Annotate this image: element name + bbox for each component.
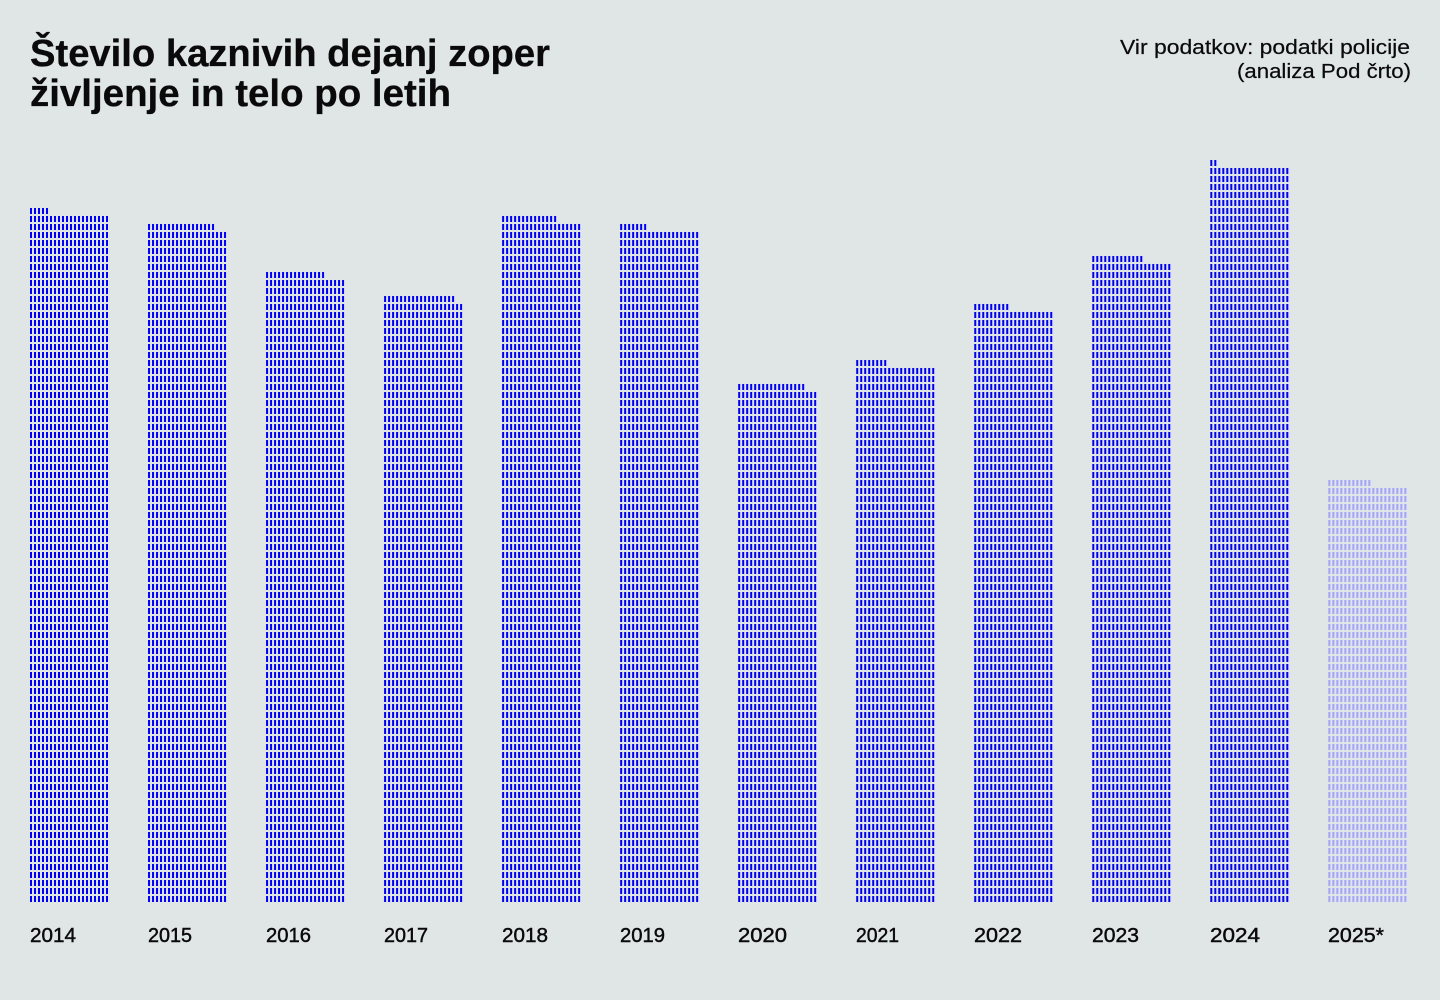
year labels: 2021 (856, 925, 899, 947)
bar 2017 (385, 296, 461, 902)
bar 2025 partial year (1329, 480, 1405, 902)
year labels: 2018 (502, 925, 548, 947)
bar 2015 (149, 224, 225, 902)
year labels (30, 925, 1384, 947)
bar 2022 (975, 304, 1051, 902)
year labels: 2015 (148, 925, 192, 947)
year labels: 2025* (1328, 925, 1384, 947)
year labels: 2020 (738, 925, 787, 947)
bar 2014 (31, 208, 107, 902)
year labels: 2016 (266, 925, 311, 947)
title (30, 30, 550, 115)
source note (1120, 37, 1411, 83)
year labels: 2022 (974, 925, 1022, 947)
title: Število kaznivih dejanj zoper (30, 30, 550, 75)
year labels: 2019 (620, 925, 665, 947)
bar 2021 (857, 360, 933, 902)
bar 2024 (1211, 160, 1287, 902)
bar 2023 (1093, 256, 1169, 902)
bar 2016 (267, 272, 343, 902)
source note: Vir podatkov: podatki policije (1120, 37, 1410, 59)
title: življenje in telo po letih (30, 73, 451, 115)
source note: (analiza Pod črto) (1237, 61, 1411, 83)
year labels: 2023 (1092, 925, 1139, 947)
year labels: 2024 (1210, 925, 1260, 947)
bar 2020 (739, 384, 815, 902)
bar 2018 (503, 216, 579, 902)
bar 2019 (621, 224, 697, 902)
year labels: 2014 (30, 925, 76, 947)
year labels: 2017 (384, 925, 428, 947)
